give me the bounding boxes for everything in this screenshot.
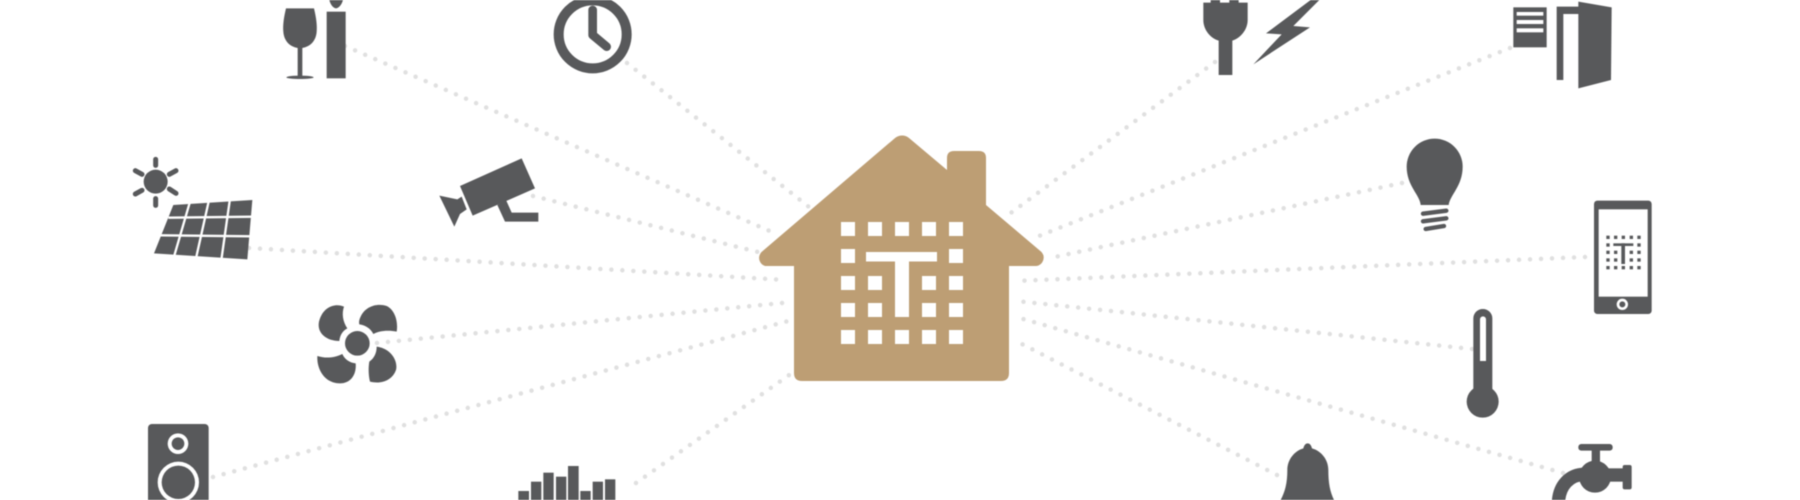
icon: light bulb (1407, 139, 1463, 229)
icon: thermometer (1467, 309, 1499, 418)
icon: clock (559, 0, 627, 68)
icon: fan (317, 305, 397, 383)
icon: smartphone with T logo (1594, 201, 1652, 314)
icon: equalizer bars (518, 466, 615, 500)
central house with T logo (759, 136, 1044, 381)
icon: keypad and door (1513, 2, 1612, 88)
icon: speaker (148, 424, 209, 500)
icon: bell (1281, 443, 1334, 500)
icon: sun and solar panel (135, 159, 253, 260)
icon: plug and lightning bolt (1203, 0, 1319, 75)
icon: water tap (1558, 444, 1632, 500)
dotted connector lines from icons to house (213, 46, 1585, 483)
icon: wine glass and bottle (283, 0, 346, 79)
icon: security camera (439, 158, 538, 227)
